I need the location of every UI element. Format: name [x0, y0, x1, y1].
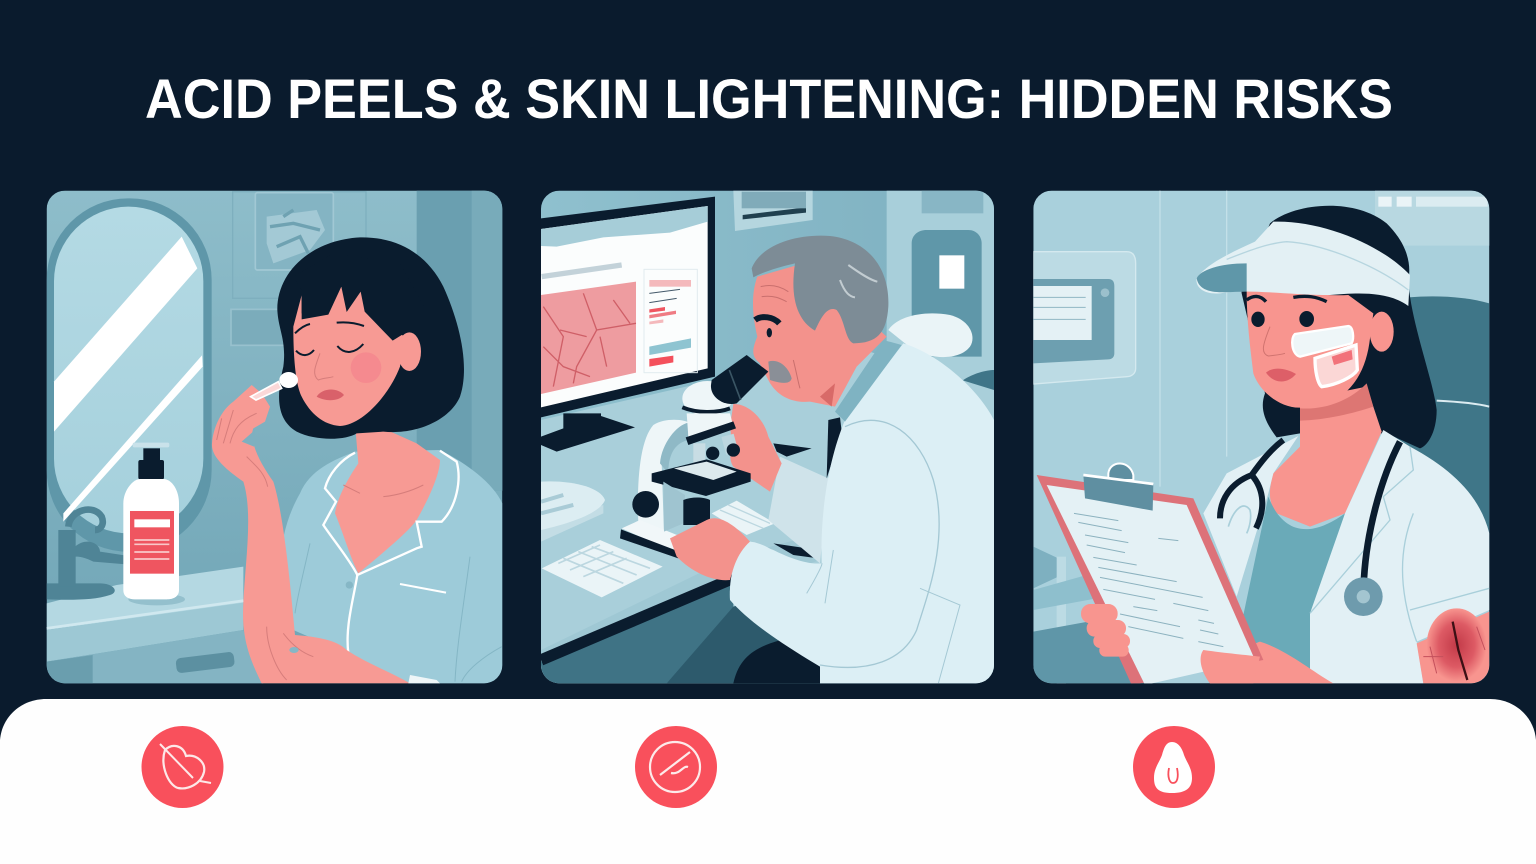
icon: circle with scratches	[635, 726, 717, 808]
lower hand	[1201, 642, 1333, 683]
wall dispenser	[912, 230, 982, 357]
lower hand	[670, 518, 750, 580]
bottle	[123, 443, 185, 605]
eyebrow and eye	[755, 317, 779, 323]
cotton swab	[251, 382, 282, 400]
lab wall background	[541, 191, 994, 683]
ear	[820, 307, 847, 343]
clinician	[1037, 206, 1489, 685]
pajama collar piping	[323, 451, 459, 575]
cheek bandage	[1292, 326, 1357, 387]
scrub top	[1237, 497, 1345, 680]
clipboard hand fingers	[1081, 604, 1130, 657]
dispenser label	[939, 255, 964, 289]
coat cuff	[730, 542, 780, 603]
screen: skin micrograph	[541, 282, 636, 394]
keyboards	[542, 501, 775, 597]
eyes and brows	[1247, 296, 1327, 356]
upper hand	[730, 404, 782, 492]
neck and chest	[1270, 387, 1382, 527]
icon: crossed-out leaf	[142, 726, 224, 808]
chair	[1387, 296, 1489, 547]
collar	[835, 340, 902, 422]
ear	[400, 332, 421, 371]
bottom white panel	[0, 699, 1536, 864]
shelf at right	[963, 370, 994, 392]
lab coat sleeve upper	[768, 457, 828, 563]
title: ACID PEELS & SKIN LIGHTENING: HIDDEN RISKS	[145, 67, 1393, 130]
monitor	[541, 197, 715, 452]
face and neck	[753, 263, 887, 407]
wall picture	[255, 193, 333, 270]
facial features	[351, 352, 381, 383]
towel	[888, 313, 972, 357]
woman	[212, 237, 502, 683]
arm and hands	[212, 385, 410, 683]
faucet	[47, 510, 133, 600]
ear	[1370, 312, 1394, 352]
clinic background	[1033, 191, 1489, 683]
necktie and collar	[827, 417, 842, 478]
lab coat left	[1203, 436, 1298, 597]
clipboard	[1037, 464, 1263, 685]
mirror	[47, 198, 212, 552]
panel: woman applying acid peel at bathroom mirror	[47, 191, 502, 683]
lips	[1266, 369, 1296, 381]
screen: side column	[644, 269, 697, 373]
neck and chest	[335, 423, 440, 573]
counter	[47, 567, 263, 683]
panel: injured clinician with clipboard	[1033, 191, 1489, 685]
hand over clipboard	[1201, 650, 1260, 683]
hair	[277, 237, 464, 439]
icon: drop	[1133, 726, 1215, 808]
stethoscope	[1220, 440, 1400, 616]
exam bed and stand	[1033, 547, 1133, 683]
lab coat	[730, 343, 994, 683]
visor	[1196, 222, 1410, 306]
pajama cuff	[408, 675, 440, 683]
pajama shirt	[280, 450, 502, 683]
panel: doctor examining skin under microscope	[541, 191, 994, 683]
arm wound	[1417, 608, 1489, 683]
wall plaque	[231, 309, 288, 345]
desk	[541, 347, 994, 683]
bangs	[302, 286, 408, 341]
doctor	[730, 236, 994, 683]
ring	[289, 647, 299, 653]
moustache	[768, 361, 792, 383]
lab coat right	[1310, 430, 1489, 683]
hair	[752, 236, 888, 343]
face	[293, 287, 405, 426]
hair	[1241, 206, 1437, 448]
paper stack	[541, 481, 605, 542]
wall background	[47, 191, 502, 683]
face	[1247, 290, 1373, 408]
microscope	[620, 355, 768, 558]
wall monitor	[1033, 252, 1136, 384]
